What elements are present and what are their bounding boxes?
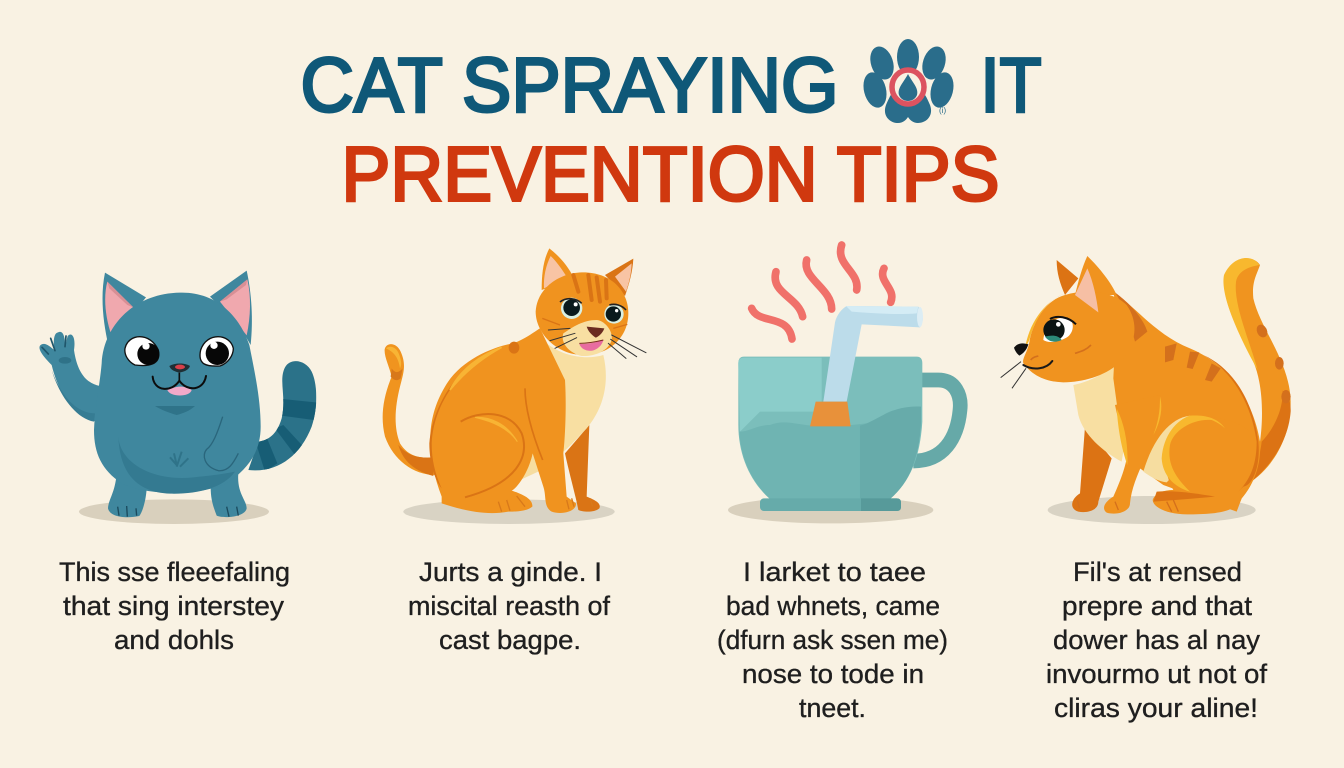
tail <box>383 344 435 475</box>
folded paw <box>204 417 238 471</box>
cup <box>738 357 922 499</box>
cork <box>810 402 851 426</box>
eyes <box>125 337 233 366</box>
caption 4 <box>1046 557 1268 723</box>
illustration: blue cat <box>39 271 320 524</box>
caption 4: dower has al nay <box>1053 625 1261 655</box>
far front leg <box>565 425 600 512</box>
caption 1: and dohls <box>114 625 234 655</box>
haunch <box>1153 416 1259 514</box>
head <box>536 248 646 358</box>
body and head <box>94 293 261 493</box>
caption 3: (dfurn ask ssen me) <box>717 625 948 655</box>
caption 1 <box>59 557 290 655</box>
straw <box>823 306 923 402</box>
icon: paw with red ring <box>860 39 957 123</box>
paw lines <box>1077 500 1178 512</box>
chest <box>547 343 606 452</box>
cream belly <box>1143 416 1197 482</box>
tail <box>1223 258 1291 487</box>
caption 3: bad whnets, came <box>726 591 940 621</box>
torso <box>1113 292 1260 512</box>
caption 2: miscital reasth of <box>408 591 610 621</box>
caption 3: I larket to taee <box>743 557 926 587</box>
back stripes <box>1115 292 1221 382</box>
paws <box>498 496 593 512</box>
title line 1: IT <box>980 42 1042 128</box>
title <box>300 39 1042 218</box>
caption 2: cast bagpe. <box>439 625 581 655</box>
illustration: orange cat facing right <box>383 248 646 524</box>
belly shading <box>118 437 235 494</box>
caption 4: Fil's at rensed <box>1073 557 1242 587</box>
tail <box>248 361 316 470</box>
saucer base <box>760 498 901 511</box>
near front leg <box>1104 395 1161 514</box>
far front leg <box>1072 427 1112 512</box>
caption 4: prepre and that <box>1062 591 1253 621</box>
icon: paw with red ring: (i) <box>939 106 946 115</box>
ears <box>103 273 146 345</box>
head <box>1001 256 1134 388</box>
caption 2: Jurts a ginde. I <box>419 557 602 587</box>
title line 2: PREVENTION TIPS <box>342 132 1000 218</box>
haunch highlights <box>1162 416 1225 492</box>
caption 3: nose to tode in <box>742 659 924 689</box>
caption 1: This sse fleeefaling <box>59 557 290 587</box>
illustration: orange cat facing left <box>1001 256 1291 524</box>
arm <box>39 332 100 422</box>
handle <box>913 380 960 461</box>
caption 4: invourmo ut not of <box>1046 659 1268 689</box>
haunch and shoulder lines <box>461 414 524 497</box>
chest <box>1073 358 1130 462</box>
caption 4: cliras your aline! <box>1054 693 1258 723</box>
cream belly <box>493 412 542 482</box>
steam <box>752 245 892 339</box>
title line 1: CAT SPRAYING <box>300 42 838 128</box>
illustration: cup with straw and steam <box>728 245 960 523</box>
caption 3 <box>717 557 948 723</box>
legs <box>108 473 147 517</box>
caption 3: tneet. <box>799 693 866 723</box>
caption 1: that sing interstey <box>63 591 285 621</box>
nose and mouth <box>153 363 206 395</box>
body <box>430 328 576 513</box>
caption 2 <box>408 557 610 655</box>
